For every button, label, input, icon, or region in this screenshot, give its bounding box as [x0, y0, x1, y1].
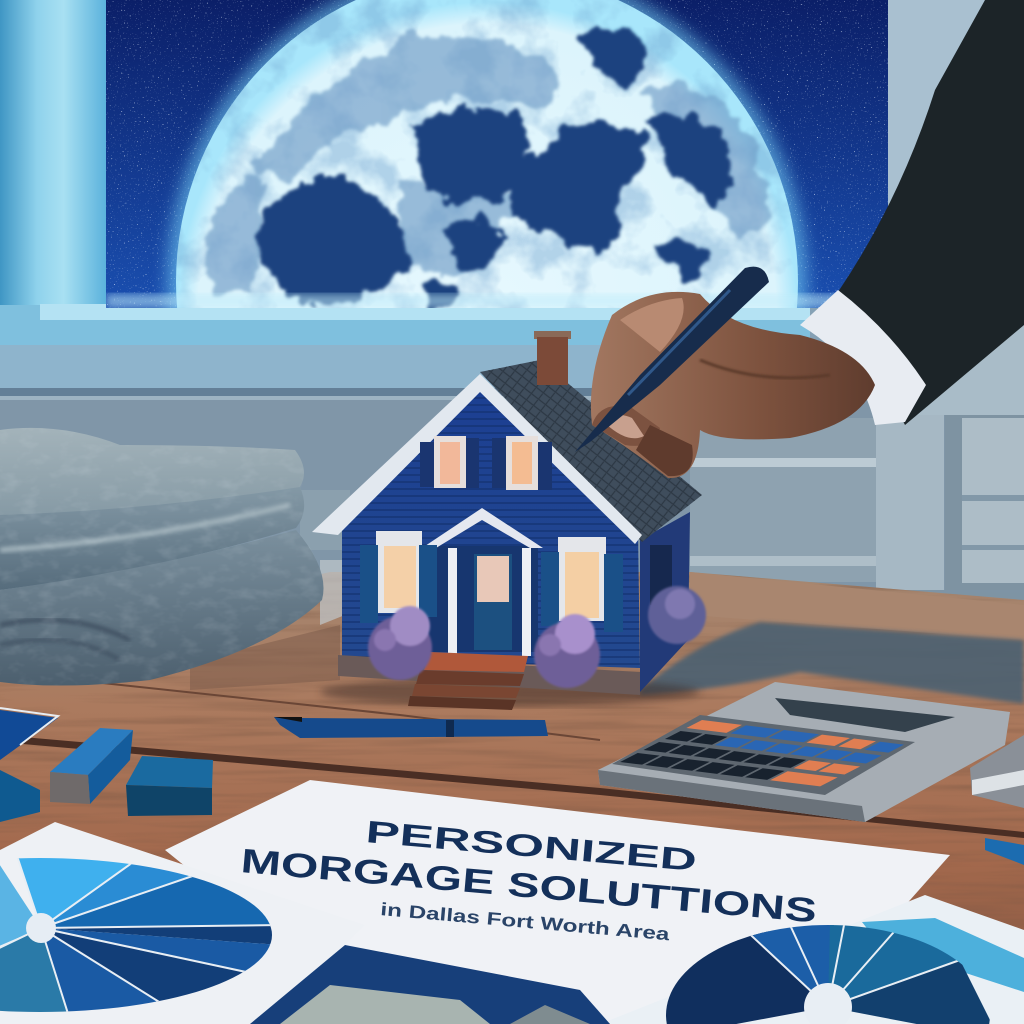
pen on table — [274, 717, 548, 738]
miniature house — [312, 331, 706, 710]
shirt cuff — [800, 290, 926, 425]
house front wall — [342, 385, 640, 668]
night sky and moon — [106, 0, 888, 308]
suit sleeve — [800, 0, 1024, 425]
main paper — [165, 780, 950, 1024]
window frame — [0, 0, 1024, 396]
house side wall — [640, 512, 690, 692]
upper windows — [434, 436, 466, 488]
foundation and steps — [338, 655, 640, 695]
porch — [428, 546, 538, 652]
lilac bushes — [368, 586, 706, 688]
wall background — [0, 0, 1024, 620]
main paper: MORGAGE SOLUTTIONS — [239, 842, 818, 930]
lower windows — [376, 531, 422, 613]
calculator — [598, 682, 1010, 822]
calculator keys — [620, 720, 904, 787]
chimney — [534, 331, 571, 339]
wooden table — [0, 560, 1024, 930]
bottom photo sheet — [250, 945, 610, 1024]
blue blocks — [0, 708, 213, 822]
headline: PERSONIZED — [364, 814, 698, 878]
small items at right edge — [970, 735, 1024, 865]
fingers — [592, 406, 660, 446]
hand with pen — [575, 267, 875, 478]
right pie chart sheet — [666, 895, 1024, 1024]
roof — [480, 360, 702, 542]
left pie chart sheet — [0, 822, 314, 1024]
lower wall panels — [0, 325, 1024, 590]
folded towels — [0, 420, 335, 690]
main paper: in Dallas Fort Worth Area — [380, 899, 672, 944]
